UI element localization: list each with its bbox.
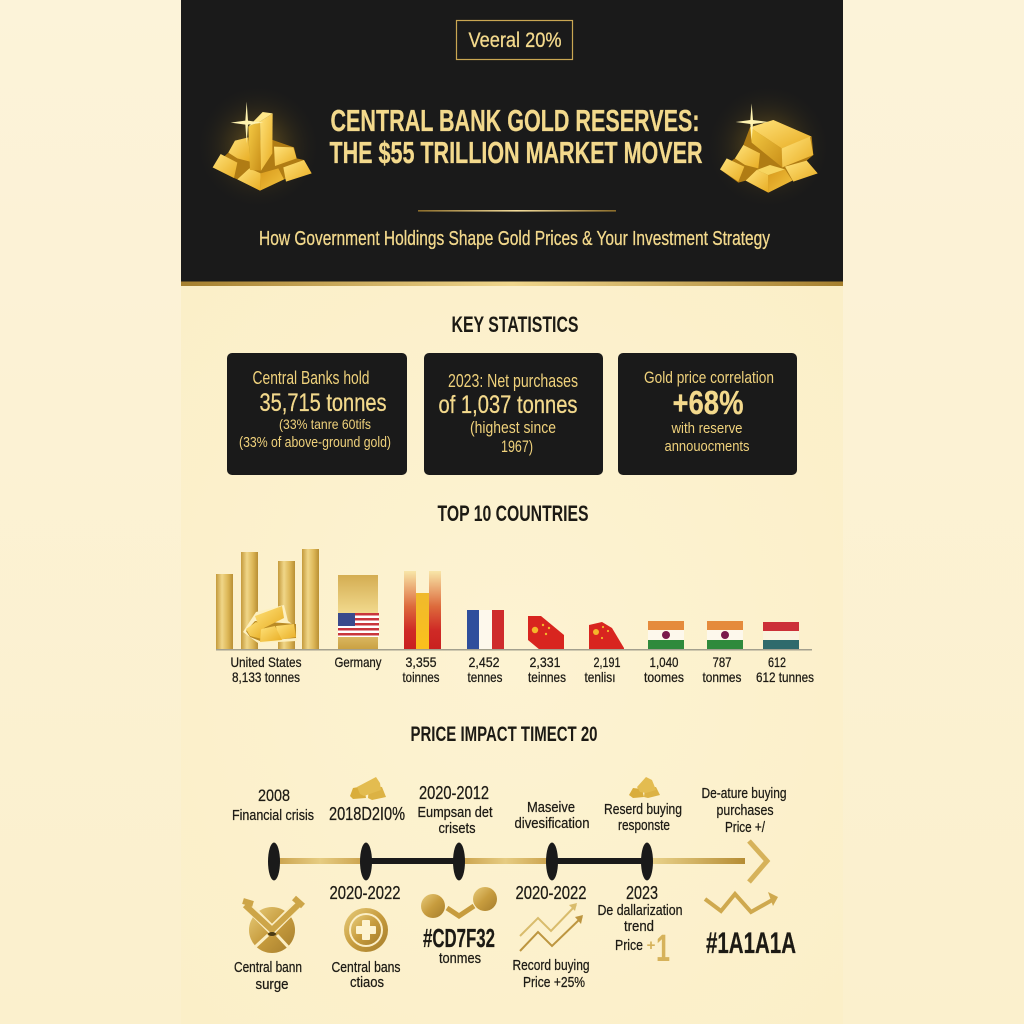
- heading: key statistics: KEY STATISTICS: [452, 312, 578, 337]
- header banner: [181, 0, 843, 286]
- timeline labels below: #CD7F32: [423, 923, 495, 953]
- timeline labels above: Reserd buying: [604, 801, 682, 818]
- timeline labels below: Price +25%: [523, 974, 585, 991]
- panel: central banks stat card: (33% of above-ground gold): [239, 434, 391, 451]
- icon: linked coins: [421, 887, 497, 918]
- panel: price correlation stat card: [618, 353, 797, 475]
- icon: gold bars above timeline 1: [350, 777, 386, 800]
- panel: net purchases stat card: 1967): [501, 437, 533, 456]
- timeline labels above: [232, 783, 786, 837]
- bar chart: top 10 countries: [216, 549, 814, 685]
- badge: [456, 20, 572, 60]
- timeline labels above: Financial crisis: [232, 807, 314, 824]
- timeline labels below: tonmes: [439, 950, 481, 967]
- chart labels: teinnes: [528, 669, 566, 685]
- panel: net purchases stat card: of 1,037 tonnes: [438, 391, 578, 419]
- bar: china second: [589, 622, 624, 650]
- timeline labels above: De-ature buying: [702, 785, 786, 802]
- title: [330, 103, 702, 170]
- timeline labels below: surge: [256, 976, 288, 993]
- chart labels: United States: [230, 654, 302, 670]
- timeline labels above: 2018D2I0%: [329, 804, 405, 824]
- timeline labels below: ctiaos: [350, 974, 384, 991]
- chart labels: tenlisı: [584, 669, 616, 685]
- panel: net purchases stat card: [424, 353, 603, 475]
- bar: india: [648, 621, 684, 650]
- chart labels: 787: [712, 654, 732, 670]
- timeline labels below: [234, 883, 796, 993]
- timeline labels above: responste: [618, 817, 670, 834]
- timeline labels below: Record buying: [512, 957, 590, 974]
- divider: [418, 210, 616, 212]
- icon: crossed arrows circle: [243, 898, 303, 953]
- gold +1: 1: [656, 928, 670, 970]
- heading: top 10 countries: TOP 10 COUNTRIES: [438, 501, 588, 526]
- chart labels: Germany: [334, 654, 382, 670]
- timeline labels above: Price +/: [725, 819, 766, 836]
- bar: france: [467, 610, 504, 650]
- icon: rising arrows: [520, 903, 583, 951]
- chart labels: 3,355: [406, 654, 437, 670]
- timeline labels below: 2020-2022: [330, 883, 400, 903]
- panel: price correlation stat card: annouocments: [664, 438, 750, 455]
- chart labels: 612: [768, 654, 786, 670]
- chart labels: tennes: [468, 669, 502, 685]
- title: CENTRAL BANK GOLD RESERVES:: [330, 103, 700, 138]
- timeline labels below: 2023: [626, 883, 658, 903]
- bar: third country: [404, 571, 441, 650]
- panel: central banks stat card: [227, 353, 407, 475]
- chart labels: [230, 654, 814, 685]
- timeline labels above: 2020-2012: [419, 783, 489, 803]
- timeline labels above: purchases: [716, 802, 774, 819]
- timeline labels below: #1A1A1A: [706, 927, 796, 960]
- panel: central banks stat card: Central Banks hold: [252, 368, 370, 388]
- icon: plus circle: [344, 908, 388, 952]
- gold +1: [647, 928, 670, 970]
- timeline labels above: Maseive: [527, 799, 575, 816]
- bar: india second: [707, 621, 743, 650]
- timeline labels below: trend: [624, 918, 654, 935]
- timeline labels below: De dallarization: [598, 902, 682, 919]
- panel: central banks stat card: 35,715 tonnes: [260, 389, 386, 417]
- timeline labels above: 2008: [258, 786, 290, 805]
- icon: right gold bars: [705, 83, 832, 210]
- badge: Veeral 20%: [468, 29, 562, 52]
- heading: price impact timeline: PRICE IMPACT TIMECT 20: [410, 723, 598, 746]
- timeline labels below: Central bans: [332, 959, 400, 976]
- chart labels: tonmes: [702, 669, 742, 685]
- content panel: [181, 282, 843, 1024]
- timeline labels below: Price: [615, 937, 643, 954]
- chart labels: 2,191: [594, 654, 621, 670]
- chart labels: 612 tunnes: [756, 669, 814, 685]
- timeline labels above: divesification: [514, 815, 590, 832]
- timeline labels above: Eumpsan det: [418, 804, 493, 821]
- panel: price correlation stat card: +68%: [672, 384, 744, 421]
- panel: central banks stat card: (33% tanre 60tifs: [279, 416, 371, 432]
- bar: tricolour: [763, 622, 799, 650]
- bar: germany with US flag: [338, 575, 379, 650]
- chart labels: 2,452: [468, 654, 500, 670]
- icon: zigzag arrow: [705, 892, 778, 912]
- icon: left gold bars: [195, 83, 322, 210]
- chart labels: 8,133 tonnes: [232, 669, 300, 685]
- panel: price correlation stat card: Gold price correlation: [644, 368, 774, 387]
- panel: net purchases stat card: (highest since: [470, 418, 556, 437]
- title: THE $55 TRILLION MARKET MOVER: [330, 135, 702, 170]
- bar: united states: [216, 549, 319, 650]
- subtitle: How Government Holdings Shape Gold Prices & Your Investment Strategy: [259, 228, 770, 250]
- bar: china: [528, 616, 564, 650]
- chart labels: toomes: [644, 669, 684, 685]
- timeline labels above: crisets: [438, 820, 476, 837]
- gold +1: +: [647, 937, 656, 954]
- panel: price correlation stat card: with reserve: [671, 420, 742, 437]
- timeline labels below: 2020-2022: [516, 883, 586, 903]
- chart labels: toinnes: [402, 669, 440, 685]
- timeline labels below: Central bann: [234, 959, 302, 976]
- icon: gold bars on chart: [243, 605, 298, 643]
- icon: gold bars above timeline 2: [629, 777, 660, 798]
- chart labels: 2,331: [530, 654, 561, 670]
- arrow head: [749, 841, 767, 882]
- panel: net purchases stat card: 2023: Net purchases: [448, 371, 578, 391]
- timeline: [268, 841, 767, 882]
- chart labels: 1,040: [650, 654, 679, 670]
